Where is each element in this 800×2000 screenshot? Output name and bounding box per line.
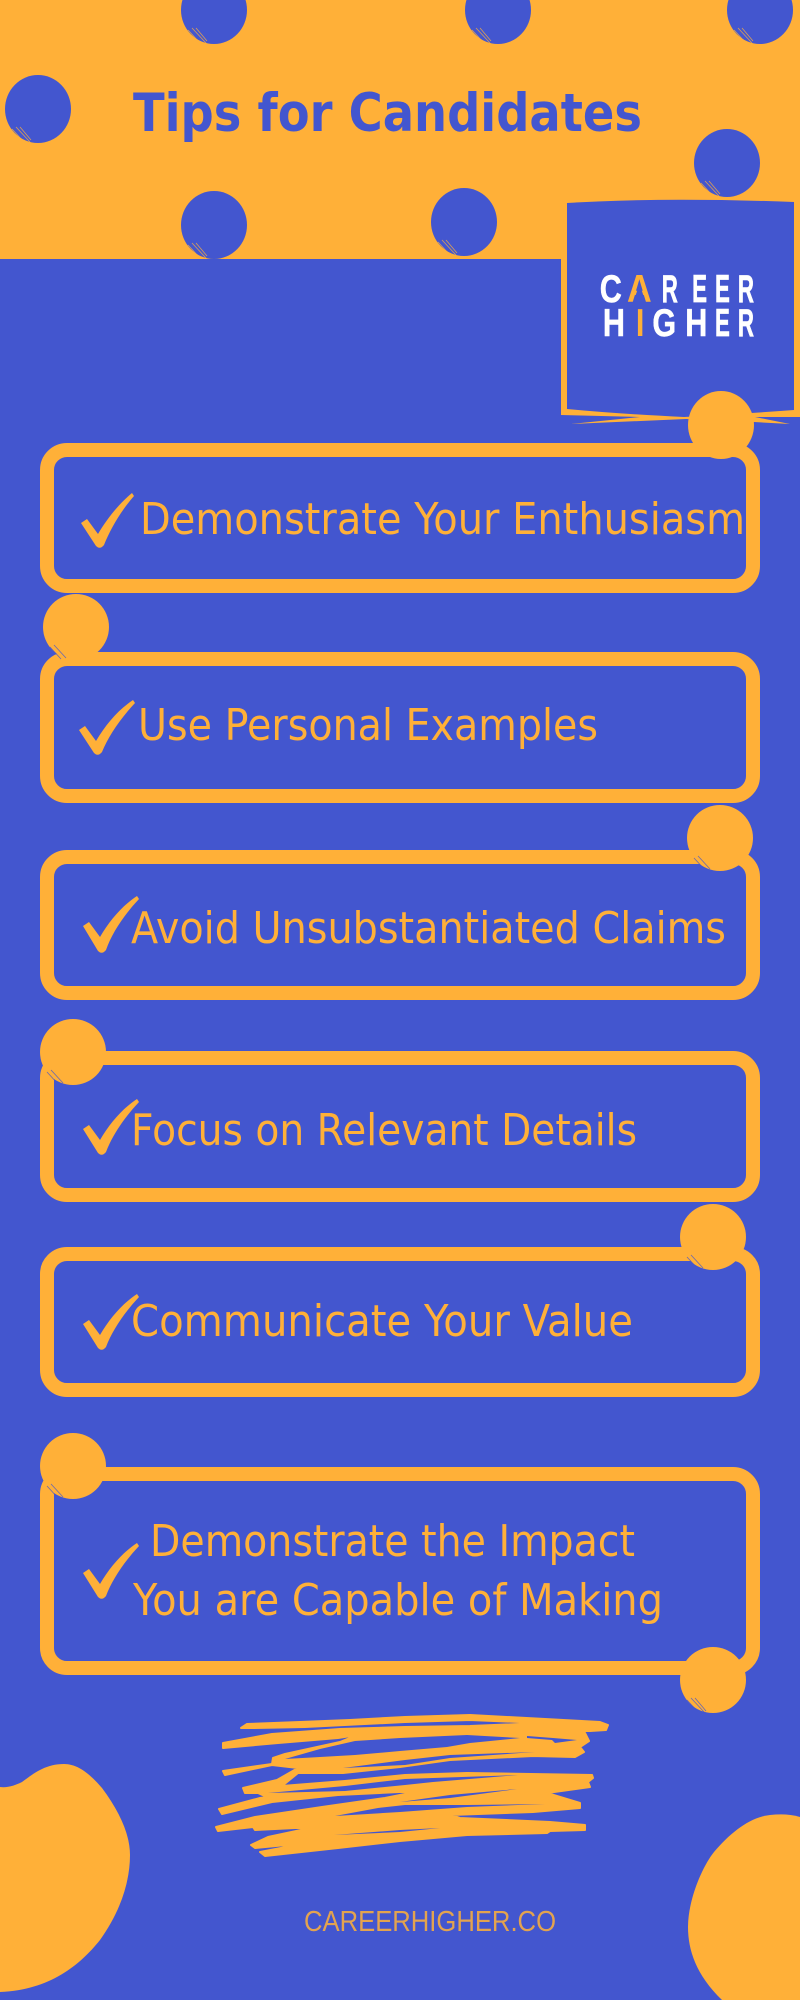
footer url: CAREERHIGHER.CO: [304, 1906, 556, 1938]
tip text 6: [132, 1516, 663, 1626]
tip text 5: Communicate Your Value: [131, 1296, 633, 1347]
tip card 5: [47, 1254, 753, 1390]
tip card 3: [47, 857, 753, 993]
tip text 6: You are Capable of Making: [132, 1575, 663, 1626]
icon: check mark 6: [83, 1543, 139, 1599]
icon: check mark 1: [81, 493, 134, 548]
decorative blue dots: [5, 0, 793, 259]
tip card 2: [47, 659, 753, 796]
icon: check mark 2: [79, 700, 135, 755]
title: Tips for Candidates: [133, 83, 642, 144]
header band: [0, 0, 800, 259]
logo panel: [561, 199, 800, 424]
icon: check mark 5: [83, 1294, 139, 1350]
logo wordmark: ER: [715, 300, 754, 345]
logo wordmark: I: [636, 302, 644, 345]
blob: bottom right: [688, 1814, 800, 2000]
scribble: [216, 1715, 608, 1856]
logo wordmark: GH: [652, 302, 707, 345]
tip card 6: [47, 1474, 753, 1668]
tip text 1: Demonstrate Your Enthusiasm: [140, 494, 745, 545]
logo wordmark: H: [603, 302, 625, 345]
icon: check mark 3: [83, 896, 139, 953]
decorative orange dots: [40, 391, 754, 1713]
icon: check mark 4: [83, 1099, 139, 1155]
logo wordmark: REER: [662, 266, 754, 311]
tip text 4: Focus on Relevant Details: [131, 1105, 637, 1156]
tip card 1: [47, 450, 753, 586]
logo wordmark: A: [627, 267, 652, 311]
logo wordmark: C: [600, 268, 622, 311]
blob: bottom left: [0, 1764, 130, 1992]
tip text 3: Avoid Unsubstantiated Claims: [131, 903, 726, 954]
tip text 2: Use Personal Examples: [138, 700, 598, 751]
logo wordmark: [600, 266, 754, 345]
tip text 6: Demonstrate the Impact: [150, 1516, 635, 1567]
tip card 4: [47, 1058, 753, 1195]
